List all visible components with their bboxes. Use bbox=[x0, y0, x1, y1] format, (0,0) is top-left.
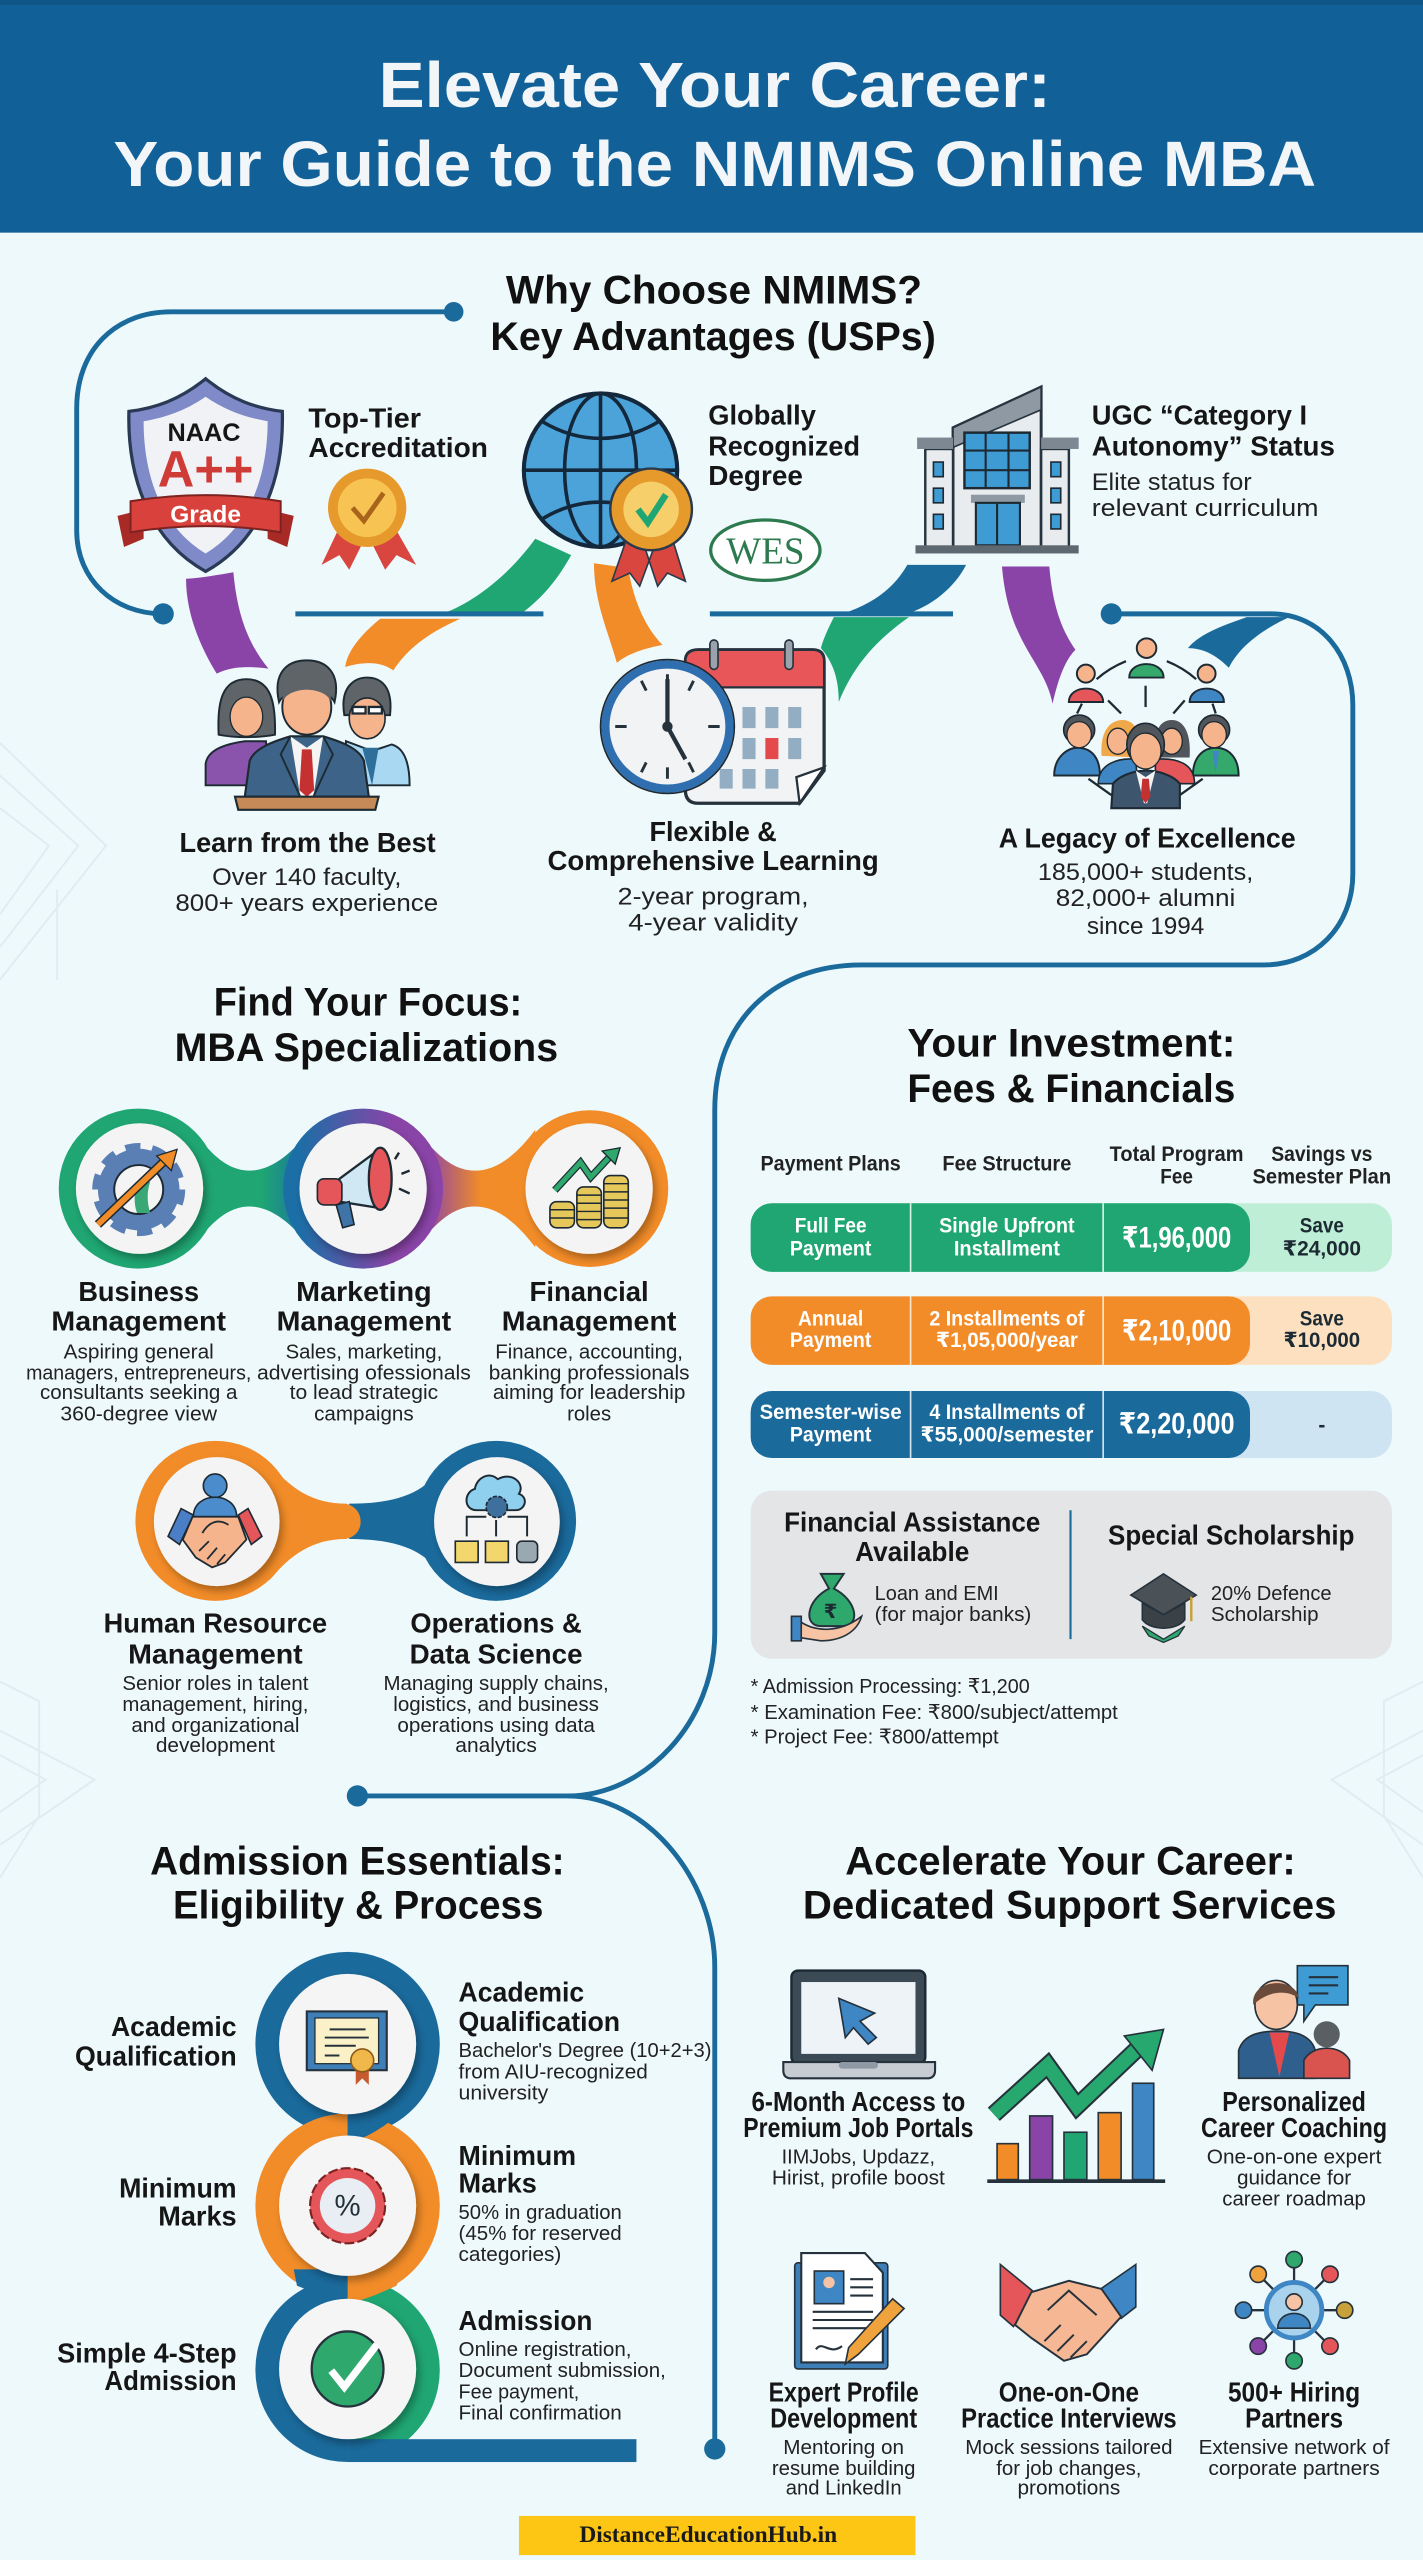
footnotes: * Project Fee: ₹800/attempt bbox=[751, 1726, 999, 1749]
section heading: your investment: Fees & Financials bbox=[907, 1067, 1235, 1111]
section heading: your investment bbox=[907, 1021, 1235, 1111]
text: expert profile development: Mentoring on bbox=[783, 2436, 904, 2459]
table column headers: Fee bbox=[1160, 1166, 1193, 1189]
text: UGC category I autonomy: relevant curriculum bbox=[1092, 496, 1319, 522]
footer badge: DistanceEducationHub.in bbox=[579, 2522, 837, 2547]
header banner bbox=[0, 0, 1423, 233]
text: top-tier accreditation: Accreditation bbox=[308, 432, 488, 463]
text: defence scholarship: 20% Defence bbox=[1211, 1582, 1332, 1605]
text: human resource management: and organizational bbox=[131, 1714, 299, 1737]
title bbox=[113, 50, 1316, 200]
panel: admission essentials bbox=[57, 1839, 711, 2462]
text: UGC category I autonomy: UGC “Category I bbox=[1092, 399, 1307, 430]
text: practice interviews: One-on-One bbox=[999, 2377, 1139, 2408]
text: human resource management: management, hiring, bbox=[122, 1693, 308, 1716]
text: business management: consultants seeking a bbox=[40, 1381, 238, 1404]
text: business management: Business bbox=[78, 1276, 199, 1307]
text: hiring partners: Extensive network of bbox=[1199, 2436, 1390, 2459]
text: expert profile development: Development bbox=[770, 2403, 917, 2434]
text: business management: Aspiring general bbox=[64, 1340, 214, 1363]
connector line: top left loop bbox=[77, 302, 463, 624]
text: financial management: Financial bbox=[530, 1276, 649, 1307]
text: career coaching: career roadmap bbox=[1222, 2188, 1366, 2211]
table row: semester-wise payment: 4 Installments of bbox=[929, 1401, 1084, 1424]
text: business management bbox=[26, 1276, 251, 1425]
text: expert profile development bbox=[769, 2377, 919, 2500]
icon: laptop bbox=[783, 1971, 935, 2078]
text: practice interviews bbox=[961, 2377, 1177, 2500]
text: job portals: Hirist, profile boost bbox=[772, 2166, 945, 2189]
text: job portals: IIMJobs, Updazz, bbox=[782, 2145, 935, 2168]
text: academic qualification detail: Academic bbox=[459, 1977, 584, 2008]
text: career coaching: Personalized bbox=[1222, 2086, 1366, 2117]
text: financial assistance: Financial Assistance bbox=[784, 1506, 1040, 1537]
table row: full fee payment: Single Upfront bbox=[939, 1215, 1075, 1238]
section heading: key advantages: Why Choose NMIMS? bbox=[506, 269, 922, 313]
text: practice interviews: Mock sessions tailored bbox=[965, 2436, 1173, 2459]
section heading: accelerate your career: Accelerate Your Career: bbox=[845, 1839, 1296, 1883]
footnotes: * Admission Processing: ₹1,200 bbox=[751, 1675, 1030, 1698]
left labels: Minimum bbox=[119, 2173, 237, 2204]
icon: NAAC shield: Grade bbox=[170, 501, 241, 528]
icon: hiring partner network bbox=[1235, 2251, 1353, 2369]
text: financial assistance bbox=[784, 1506, 1040, 1567]
icon: NAAC shield: NAAC bbox=[167, 419, 241, 447]
left labels: Admission bbox=[104, 2365, 237, 2396]
text: flexible learning: 2-year program, bbox=[618, 884, 809, 910]
text: admission detail: Admission bbox=[459, 2305, 592, 2336]
text: globally recognized degree: Recognized bbox=[708, 431, 860, 462]
text: practice interviews: for job changes, bbox=[996, 2457, 1142, 2480]
chain graphic: three linked rings bbox=[255, 1952, 636, 2462]
text: operations and data science: Operations & bbox=[410, 1608, 582, 1639]
text: admission detail: Final confirmation bbox=[459, 2402, 622, 2425]
text: career coaching bbox=[1201, 2086, 1387, 2211]
table column headers: Fee Structure bbox=[942, 1153, 1071, 1176]
section heading: key advantages: Key Advantages (USPs) bbox=[490, 315, 936, 359]
left labels: Academic bbox=[111, 2011, 237, 2042]
text: business management: Management bbox=[51, 1306, 226, 1337]
icon: gear and arrow bbox=[97, 1148, 180, 1231]
text: minimum marks detail: (45% for reserved bbox=[459, 2222, 622, 2245]
text: expert profile development: resume building bbox=[772, 2457, 915, 2480]
text: financial assistance: Available bbox=[855, 1536, 969, 1567]
icon: handshake bbox=[1000, 2264, 1136, 2361]
text: financial management: aiming for leadership bbox=[493, 1381, 685, 1404]
text: admission detail bbox=[459, 2305, 666, 2425]
icon: money bag in hand: ₹ bbox=[824, 1601, 837, 1623]
text: academic qualification detail bbox=[459, 1977, 712, 2105]
table column headers: Savings vs bbox=[1271, 1143, 1372, 1166]
text: marketing management: to lead strategic bbox=[290, 1381, 438, 1404]
text: business management: managers, entrepreneurs, bbox=[26, 1362, 251, 1385]
table row: semester-wise payment: ₹55,000/semester bbox=[920, 1424, 1093, 1447]
table column headers: Total Program bbox=[1110, 1143, 1243, 1166]
icon: NAAC shield: A++ bbox=[158, 441, 253, 498]
text: learn from the best: Over 140 faculty, bbox=[212, 865, 401, 891]
text: financial management: banking professionals bbox=[489, 1362, 689, 1385]
text: UGC category I autonomy bbox=[1092, 399, 1335, 522]
table row: semester-wise payment: Semester-wise bbox=[760, 1401, 902, 1424]
text: defence scholarship: Scholarship bbox=[1211, 1603, 1319, 1626]
text: legacy of excellence: 82,000+ alumni bbox=[1056, 886, 1235, 912]
icon: certificate bbox=[307, 2011, 387, 2085]
section heading: find your focus bbox=[175, 981, 558, 1070]
icon: HR handshake bbox=[168, 1474, 262, 1567]
text: operations and data science: Managing supply chains, bbox=[383, 1672, 609, 1695]
text: operations and data science bbox=[383, 1608, 609, 1757]
footnotes bbox=[751, 1675, 1118, 1749]
table column headers: Semester Plan bbox=[1252, 1166, 1391, 1189]
section heading: your investment: Your Investment: bbox=[907, 1021, 1235, 1065]
icon: alumni network bbox=[1054, 638, 1239, 808]
text: practice interviews: Practice Interviews bbox=[961, 2403, 1177, 2434]
text: top-tier accreditation bbox=[308, 403, 488, 463]
panel: financial assistance and scholarship bbox=[751, 1491, 1392, 1659]
text: loan and EMI: (for major banks) bbox=[875, 1603, 1031, 1626]
panel: MBA specializations bbox=[26, 981, 689, 1757]
text: marketing management: Marketing bbox=[296, 1276, 432, 1307]
table row: full fee payment: ₹24,000 bbox=[1283, 1238, 1361, 1261]
text: operations and data science: analytics bbox=[455, 1734, 537, 1757]
text: human resource management: Human Resource bbox=[104, 1608, 327, 1639]
text: financial management: Management bbox=[502, 1306, 676, 1337]
section heading: admission essentials bbox=[150, 1839, 565, 1927]
text: expert profile development: Expert Profile bbox=[769, 2377, 919, 2408]
table row: annual payment: ₹2,10,000 bbox=[1122, 1314, 1231, 1347]
section heading: accelerate your career bbox=[803, 1839, 1337, 1927]
icon: coins and growth arrow bbox=[550, 1148, 628, 1228]
section heading: admission essentials: Admission Essentials: bbox=[150, 1839, 565, 1883]
table row: full fee payment: Payment bbox=[790, 1238, 871, 1261]
text: learn from the best bbox=[175, 827, 438, 917]
left labels: Qualification bbox=[75, 2040, 237, 2071]
text: operations and data science: Data Science bbox=[410, 1639, 583, 1670]
table row: full fee payment: Installment bbox=[954, 1238, 1060, 1261]
chain graphic: second row rings bbox=[135, 1441, 576, 1601]
text: minimum marks detail: categories) bbox=[459, 2243, 561, 2266]
icon: WES logo: WES bbox=[726, 531, 805, 572]
title: Your Guide to the NMIMS Online MBA bbox=[113, 129, 1316, 200]
text: business management: 360-degree view bbox=[60, 1402, 217, 1425]
text: expert profile development: and LinkedIn bbox=[786, 2477, 902, 2500]
table row: full fee payment bbox=[751, 1203, 1392, 1272]
table column headers: Payment Plans bbox=[760, 1153, 901, 1176]
table row: semester-wise payment: Payment bbox=[790, 1424, 871, 1447]
text: admission detail: Document submission, bbox=[459, 2359, 666, 2382]
icon: money bag in hand bbox=[791, 1574, 862, 1641]
text: admission detail: Online registration, bbox=[459, 2338, 632, 2361]
table row: full fee payment: Full Fee bbox=[795, 1215, 867, 1238]
text: human resource management: Management bbox=[128, 1639, 303, 1670]
text: hiring partners: Partners bbox=[1245, 2403, 1343, 2434]
table row: annual payment: ₹10,000 bbox=[1283, 1329, 1360, 1352]
icon: faculty group at podium bbox=[206, 660, 410, 810]
left labels: Simple 4-Step bbox=[57, 2337, 237, 2368]
text: flexible learning: Comprehensive Learning bbox=[547, 845, 879, 876]
text: minimum marks detail: Minimum bbox=[459, 2140, 576, 2171]
text: hiring partners: corporate partners bbox=[1208, 2457, 1380, 2480]
ribbon connector lines and swooshes bbox=[186, 539, 1289, 704]
text: loan and EMI bbox=[875, 1582, 1031, 1626]
text: globally recognized degree: Degree bbox=[708, 460, 803, 491]
section heading: key advantages bbox=[490, 269, 936, 359]
text: job portals: Premium Job Portals bbox=[743, 2112, 973, 2143]
text: hiring partners bbox=[1199, 2377, 1390, 2480]
icon: career coach bbox=[1239, 1966, 1350, 2078]
icon: university building bbox=[915, 387, 1079, 553]
text: operations and data science: operations using data bbox=[397, 1714, 595, 1737]
icon: cloud data flow bbox=[455, 1476, 538, 1562]
text: marketing management: advertising ofessionals bbox=[257, 1362, 471, 1385]
text: human resource management bbox=[104, 1608, 327, 1757]
panel: why choose NMIMS bbox=[117, 269, 1335, 940]
panel: fees and financials bbox=[751, 1021, 1392, 1749]
icon: graduation cap bbox=[1131, 1574, 1196, 1642]
text: special scholarship: Special Scholarship bbox=[1108, 1519, 1354, 1550]
text: career coaching: One-on-one expert bbox=[1207, 2145, 1382, 2168]
table row: annual payment: Payment bbox=[790, 1329, 871, 1352]
text: financial management bbox=[489, 1276, 689, 1425]
text: top-tier accreditation: Top-Tier bbox=[308, 403, 421, 434]
table row: annual payment: 2 Installments of bbox=[929, 1308, 1084, 1331]
text: flexible learning: Flexible & bbox=[649, 816, 777, 847]
table row: annual payment: Save bbox=[1300, 1308, 1344, 1331]
text: financial management: Finance, accounting, bbox=[495, 1340, 683, 1363]
text: minimum marks detail: Marks bbox=[459, 2168, 537, 2199]
text: legacy of excellence bbox=[999, 822, 1296, 940]
text: flexible learning: 4-year validity bbox=[628, 911, 798, 937]
text: academic qualification detail: Qualification bbox=[459, 2006, 620, 2037]
footer badge bbox=[519, 2516, 915, 2555]
section heading: find your focus: Find Your Focus: bbox=[214, 981, 522, 1025]
text: academic qualification detail: Bachelor's Degree (10+2+3) bbox=[459, 2039, 711, 2062]
text: marketing management: campaigns bbox=[314, 1402, 414, 1425]
text: hiring partners: 500+ Hiring bbox=[1228, 2377, 1360, 2408]
table row: full fee payment: Save bbox=[1300, 1215, 1344, 1238]
table row: full fee payment: ₹1,96,000 bbox=[1122, 1221, 1231, 1254]
icon: resume and pencil bbox=[795, 2253, 904, 2369]
panel: career support services bbox=[743, 1839, 1390, 2500]
text: globally recognized degree bbox=[708, 399, 860, 491]
text: flexible learning bbox=[547, 816, 879, 937]
connector line: winding path through page bbox=[347, 603, 1353, 2460]
title: Elevate Your Career: bbox=[379, 50, 1051, 121]
text: career coaching: guidance for bbox=[1237, 2166, 1351, 2189]
section heading: find your focus: MBA Specializations bbox=[175, 1026, 558, 1070]
icon: green check bbox=[312, 2331, 383, 2407]
text: marketing management: Management bbox=[277, 1306, 451, 1337]
text: minimum marks detail: 50% in graduation bbox=[459, 2201, 622, 2224]
footnotes: * Examination Fee: ₹800/subject/attempt bbox=[751, 1701, 1118, 1724]
section heading: admission essentials: Eligibility & Process bbox=[173, 1883, 543, 1927]
table row: semester-wise payment bbox=[751, 1391, 1392, 1458]
text: practice interviews: promotions bbox=[1017, 2477, 1120, 2500]
text: marketing management: Sales, marketing, bbox=[286, 1340, 442, 1363]
text: human resource management: development bbox=[156, 1734, 275, 1757]
icon: globe with rosette bbox=[524, 393, 692, 586]
table row: semester-wise payment: ₹2,20,000 bbox=[1119, 1407, 1235, 1440]
table column headers bbox=[760, 1143, 1391, 1189]
text: financial management: roles bbox=[567, 1402, 611, 1425]
icon: growth bar chart bbox=[987, 2029, 1165, 2181]
text: job portals: 6-Month Access to bbox=[751, 2086, 965, 2117]
table row: semester-wise payment: - bbox=[1318, 1414, 1325, 1437]
text: human resource management: Senior roles in talent bbox=[122, 1672, 309, 1695]
icon: clock and calendar bbox=[601, 640, 824, 803]
text: minimum marks detail bbox=[459, 2140, 622, 2266]
icon: megaphone bbox=[317, 1148, 410, 1228]
table row: annual payment bbox=[751, 1296, 1392, 1365]
text: academic qualification detail: university bbox=[459, 2082, 549, 2105]
left labels bbox=[57, 2011, 237, 2396]
icon: gold medal bbox=[321, 469, 416, 570]
chain graphic: first row rings bbox=[59, 1109, 668, 1269]
text: operations and data science: logistics, and business bbox=[393, 1693, 599, 1716]
text: legacy of excellence: A Legacy of Excellence bbox=[999, 822, 1296, 853]
text: marketing management bbox=[257, 1276, 471, 1425]
text: legacy of excellence: 185,000+ students, bbox=[1038, 860, 1253, 886]
icon: NAAC shield bbox=[117, 379, 294, 571]
text: learn from the best: Learn from the Best bbox=[180, 827, 436, 858]
text: admission detail: Fee payment, bbox=[459, 2380, 579, 2403]
text: academic qualification detail: from AIU-recognized bbox=[459, 2060, 648, 2083]
icon: WES logo bbox=[711, 520, 820, 580]
text: UGC category I autonomy: Autonomy” Status bbox=[1092, 431, 1335, 462]
left labels: Marks bbox=[158, 2200, 237, 2231]
section heading: accelerate your career: Dedicated Support Services bbox=[803, 1883, 1337, 1927]
icon: percent badge: % bbox=[335, 2190, 361, 2223]
table row: annual payment: Annual bbox=[798, 1308, 863, 1331]
text: job portals bbox=[743, 2086, 973, 2189]
text: learn from the best: 800+ years experience bbox=[175, 891, 438, 917]
text: globally recognized degree: Globally bbox=[708, 399, 817, 430]
text: loan and EMI: Loan and EMI bbox=[875, 1582, 999, 1605]
text: legacy of excellence: since 1994 bbox=[1087, 914, 1204, 940]
table row: annual payment: ₹1,05,000/year bbox=[936, 1329, 1078, 1352]
text: career coaching: Career Coaching bbox=[1201, 2112, 1387, 2143]
text: UGC category I autonomy: Elite status for bbox=[1092, 470, 1252, 496]
icon: percent badge bbox=[310, 2168, 385, 2243]
text: defence scholarship bbox=[1211, 1582, 1332, 1626]
